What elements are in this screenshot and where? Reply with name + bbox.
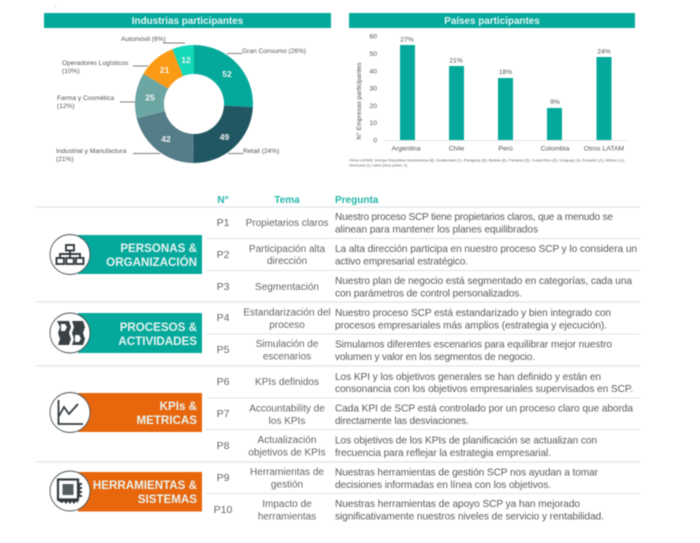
row P4: Estandarización del xyxy=(243,308,331,318)
bar chart: 9% xyxy=(550,99,560,106)
heading: paises participantes: Países participantes xyxy=(444,16,540,27)
row P7: P7 xyxy=(217,408,230,420)
bar chart: 18% xyxy=(499,69,512,76)
row P4: proceso xyxy=(269,320,305,331)
donut chart: 49 xyxy=(220,132,229,142)
row P2: P2 xyxy=(217,249,230,261)
row P8: P8 xyxy=(217,440,230,452)
row P10: Nuestras herramientas de apoyo SCP ya han mejorado xyxy=(335,499,580,510)
row P9 xyxy=(217,467,599,491)
donut labels: Automóvil (6%) xyxy=(121,36,166,43)
row P5 xyxy=(217,339,612,363)
row P2: Participación alta xyxy=(249,244,326,255)
category: procesos y actividades: PROCESOS & xyxy=(120,321,198,334)
row P5: escenarios xyxy=(263,352,311,362)
bar chart xyxy=(355,34,628,152)
bar chart: 10 xyxy=(369,120,377,127)
donut chart: 42 xyxy=(161,134,171,144)
row P7: Accountability de xyxy=(249,404,325,414)
row P1: alinean para mantener los planes equilibrados xyxy=(335,224,538,236)
bar chart: 21% xyxy=(449,58,463,64)
row P5: Simulamos diferentes escenarios para equilibrar mejor nuestro xyxy=(335,340,612,350)
category: procesos y actividades: ACTIVIDADES xyxy=(118,335,197,348)
donut labels: (12%) xyxy=(57,103,75,110)
heading: industrias participantes: Industrias participantes xyxy=(132,16,244,27)
table header: Tema xyxy=(274,195,300,206)
row P6: KPIs definidos xyxy=(255,377,319,388)
donut chart: 12 xyxy=(181,55,191,65)
row P10: Impacto de xyxy=(262,499,312,510)
donut labels: Gran Consumo (26%) xyxy=(242,48,306,55)
row P7 xyxy=(217,404,633,427)
row P8: frecuencia para reflejar la estrategia empresarial. xyxy=(335,448,551,459)
bar chart: Argentina xyxy=(391,146,421,152)
row P4 xyxy=(217,308,611,332)
row P3: P3 xyxy=(217,281,230,293)
row P2: La alta dirección participa en nuestro proceso SCP y lo considera un xyxy=(335,244,637,255)
heading: paises participantes xyxy=(349,13,635,28)
row P3 xyxy=(217,276,632,300)
bar chart: 27% xyxy=(400,36,414,44)
donut chart: 25 xyxy=(145,92,155,102)
table header: Pregunta xyxy=(335,195,379,206)
row P1: Nuestro proceso SCP tiene propietarios claros, que a menudo se xyxy=(335,212,613,223)
row P8: objetivos de KPIs xyxy=(248,448,326,458)
row P5: Simulación de xyxy=(256,339,319,350)
row P2 xyxy=(217,244,637,268)
donut labels: (21%) xyxy=(56,156,74,163)
row P4: P4 xyxy=(217,312,230,324)
row P9: P9 xyxy=(217,472,230,484)
bar chart: Perú xyxy=(498,146,513,152)
category: procesos y actividades xyxy=(50,313,202,353)
row P6: P6 xyxy=(217,376,230,388)
donut chart xyxy=(135,45,253,163)
icon: org chart xyxy=(50,234,90,274)
donut chart: 21 xyxy=(160,65,169,75)
table header: N° xyxy=(217,195,229,206)
row P9: decisiones informadas en línea con los objetivos. xyxy=(335,480,551,491)
row P9: Herramientas de xyxy=(250,467,324,478)
row P8 xyxy=(217,435,597,459)
row P1: Propietarios claros xyxy=(246,218,328,229)
row P7: los KPIs xyxy=(269,416,305,427)
row P10: herramientas xyxy=(258,512,316,522)
row P7: Cada KPI de SCP está controlado por un proceso claro que aborda xyxy=(335,404,633,414)
donut labels: Industrial y Manufactura xyxy=(56,148,127,155)
row P7: directamente las desviaciones. xyxy=(335,416,469,427)
bar chart: Otros LATAM xyxy=(584,146,624,152)
row P1: P1 xyxy=(217,217,230,229)
category: herramientas y sistemas: SISTEMAS xyxy=(138,493,197,506)
heading: industrias participantes xyxy=(44,13,331,28)
row P1 xyxy=(217,212,613,236)
category: kpis y metricas: METRICAS xyxy=(136,414,197,427)
donut labels: Retail (24%) xyxy=(243,148,279,155)
row P6 xyxy=(217,372,633,395)
table header xyxy=(217,195,379,206)
icon: line chart xyxy=(50,392,90,432)
bar chart: 0 xyxy=(373,138,377,144)
bar chart: 24% xyxy=(597,48,611,56)
row P2: dirección xyxy=(267,256,307,267)
bar chart: 60 xyxy=(369,34,377,40)
category: herramientas y sistemas: HERRAMIENTAS & xyxy=(93,479,198,492)
donut labels: Farma y Cosmética xyxy=(57,95,114,102)
bar chart: 30 xyxy=(369,86,377,92)
donut chart: 52 xyxy=(222,69,232,79)
panel: paises participantes xyxy=(349,13,635,168)
chart footnote: Otros LATAM: Incluye República Dominicana (8), Guatemala (7), Paraguay (6), Bolivia (6), Panamá (5), Costa Rica (3), Uruguay (3), Ecuador (2), México (1), xyxy=(349,158,625,162)
bar chart: 50 xyxy=(369,51,377,58)
row P5: volumen y valor en los segmentos de negocio. xyxy=(335,352,535,363)
category: personas y organizacion xyxy=(50,234,202,274)
row P5: P5 xyxy=(217,344,230,356)
row P4: procesos empresariales más amplios (estrategia y ejecución). xyxy=(335,320,607,332)
row P9: gestión xyxy=(271,480,303,490)
row P10 xyxy=(214,499,604,522)
icon: process blocks xyxy=(50,313,90,353)
chart footnote xyxy=(349,158,625,168)
bar chart: 20 xyxy=(369,103,377,110)
row P4: Nuestro proceso SCP está estandarizado y bien integrado con xyxy=(335,308,611,319)
category: personas y organizacion: ORGANIZACIÓN xyxy=(106,256,197,269)
row P10: significativamente nuestros niveles de servicio y rentabilidad. xyxy=(335,512,604,522)
panel: industrias participantes xyxy=(44,13,331,163)
row P3: con parámetros de control personalizados. xyxy=(335,288,522,300)
category: kpis y metricas xyxy=(50,392,202,432)
category: herramientas y sistemas xyxy=(50,471,202,512)
category: personas y organizacion: PERSONAS & xyxy=(120,242,198,255)
icon: microchip xyxy=(50,471,90,511)
bar chart: 40 xyxy=(369,68,377,76)
donut labels xyxy=(56,36,306,163)
chart footnote: Venezuela (1), Laben (otros países, 5). xyxy=(349,162,408,168)
row P9: Nuestras herramientas de gestión SCP nos ayudan a tomar xyxy=(335,468,599,478)
row P8: Los objetivos de los KPIs de planificación se actualizan con xyxy=(335,436,597,446)
donut labels: Operadores Logísticos xyxy=(62,60,129,67)
bar chart: Chile xyxy=(449,146,464,152)
row P8: Actualización xyxy=(258,435,316,446)
row P6: Los KPI y los objetivos generales se han definido y están en xyxy=(335,372,601,383)
bar chart: Colombia xyxy=(541,146,570,152)
row P3: Nuestro plan de negocio está segmentado en categorías, cada una xyxy=(335,276,632,287)
row P2: activo empresarial estratégico. xyxy=(335,256,468,268)
row P6: consonancia con los objetivos empresariales supervisados en SCP. xyxy=(335,384,633,395)
donut labels: (10%) xyxy=(62,68,80,75)
bar chart: N° Empresas participantes xyxy=(355,62,363,140)
row P10: P10 xyxy=(214,504,232,516)
row P3: Segmentación xyxy=(255,282,319,293)
category: kpis y metricas: KPIs & xyxy=(160,400,198,413)
